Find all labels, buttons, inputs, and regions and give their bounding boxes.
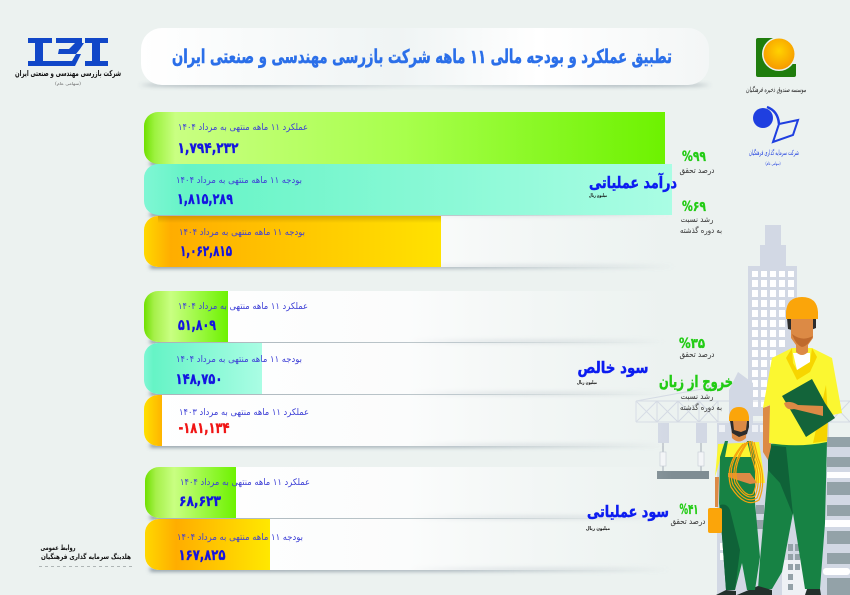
- bar: actual operating profit: [145, 467, 672, 518]
- bar: actual revenue: [144, 112, 665, 164]
- title banner: تطبیق عملکرد و بودجه مالی ۱۱ ماهه شرکت بازرسی مهندسی و صنعتی ایران: [172, 46, 672, 68]
- stats: net profit achievement and growth: [659, 336, 733, 412]
- bar: prior revenue: [144, 216, 672, 267]
- helmet: [729, 407, 749, 421]
- helmet: [786, 297, 818, 319]
- credit: public relations: روابط عمومی: [40, 544, 76, 552]
- stats: revenue achievement and growth: به دوره گذشته: [680, 225, 722, 235]
- building tower: [748, 225, 797, 416]
- bar: budget operating profit: [145, 519, 672, 570]
- bar: actual net profit: [144, 291, 672, 342]
- logo: teachers reserve fund: موسسه صندوق ذخیره فرهنگیان: [746, 85, 806, 94]
- bar: actual operating profit: عملکرد ۱۱ ماهه منتهی به مرداد ۱۴۰۴: [180, 478, 310, 488]
- heading: net profit: [577, 358, 648, 386]
- heading: operating profit: میلیون ریال: [586, 526, 610, 532]
- panel: operating profit: [145, 467, 706, 571]
- logo: teachers reserve fund: [746, 37, 806, 94]
- stats: revenue achievement and growth: [680, 149, 722, 235]
- bar: budget revenue: بودجه ۱۱ ماهه منتهی به مرداد ۱۴۰۴: [176, 176, 302, 186]
- bar: prior revenue: ۱,۰۶۲,۸۱۵: [180, 242, 232, 260]
- bar: budget operating profit: ۱۶۷,۸۲۵: [178, 546, 226, 564]
- bar: actual operating profit: ۶۸,۶۲۳: [179, 492, 221, 510]
- bar: budget operating profit: بودجه ۱۱ ماهه منتهی به مرداد ۱۴۰۴: [177, 533, 303, 543]
- title banner: [140, 28, 710, 87]
- bar: budget revenue: ۱,۸۱۵,۲۸۹: [177, 190, 233, 208]
- credit: public relations: [39, 544, 132, 566]
- stats: net profit achievement and growth: رشد نسبت: [680, 392, 714, 401]
- heading: operating profit: سود عملیاتی: [587, 502, 669, 521]
- logo: teachers investment company: (سهامی عام): [766, 161, 781, 167]
- illustration: large worker: [737, 297, 842, 595]
- stats: net profit achievement and growth: خروج از زیان: [659, 372, 733, 391]
- credit: public relations: هلدینگ سرمایه گذاری فرهنگیان: [41, 552, 131, 561]
- bar: budget revenue: [144, 164, 672, 215]
- stats: net profit achievement and growth: %۳۵: [679, 336, 705, 352]
- bar: actual revenue: ۱,۷۹۴,۲۳۲: [178, 139, 238, 157]
- bar: actual revenue: عملکرد ۱۱ ماهه منتهی به مرداد ۱۴۰۴: [178, 123, 308, 133]
- toolbox: [708, 508, 722, 533]
- logo: IEI company: (سهامی عام): [55, 81, 81, 86]
- panel: operating revenue: [144, 112, 722, 268]
- heading: operating revenue: درآمد عملیاتی: [589, 172, 677, 192]
- stats: operating profit achievement: [670, 502, 706, 526]
- logo: IEI company: شرکت بازرسی مهندسی و صنعتی ایران: [15, 69, 121, 78]
- stats: revenue achievement and growth: رشد نسبت: [680, 215, 714, 224]
- heading: net profit: سود خالص: [578, 358, 648, 377]
- stats: revenue achievement and growth: %۶۹: [682, 199, 706, 215]
- logo: teachers investment company: شرکت سرمایه گذاری فرهنگیان: [749, 148, 799, 157]
- bar: actual net profit: ۵۱,۸۰۹: [178, 316, 216, 334]
- illustration: small worker: [708, 407, 765, 595]
- bar: budget net profit: بودجه ۱۱ ماهه منتهی به مرداد ۱۴۰۴: [176, 355, 302, 365]
- bar: prior revenue: بودجه ۱۱ ماهه منتهی به مرداد ۱۴۰۴: [179, 228, 305, 238]
- stats: net profit achievement and growth: به دوره گذشته: [680, 402, 722, 412]
- heading: net profit: میلیون ریال: [577, 380, 597, 386]
- stats: revenue achievement and growth: درصد تحقق: [680, 166, 715, 175]
- stats: net profit achievement and growth: درصد تحقق: [680, 350, 715, 359]
- clipboard: [782, 379, 835, 437]
- rope coil: [729, 441, 763, 503]
- pants: [758, 441, 827, 589]
- bar: budget net profit: [144, 343, 672, 394]
- bar: actual net profit: عملکرد ۱۱ ماهه منتهی به مرداد ۱۴۰۴: [178, 302, 308, 312]
- lower building with stripes: [717, 372, 850, 595]
- stats: revenue achievement and growth: %۹۹: [682, 149, 706, 165]
- stats: operating profit achievement: %۴۱: [680, 502, 698, 518]
- bar: prior net profit: عملکرد ۱۱ ماهه منتهی به مرداد ۱۴۰۳: [179, 408, 309, 418]
- logo: teachers investment company: [749, 107, 799, 167]
- heading: operating revenue: میلیون ریال: [589, 193, 607, 199]
- stats: operating profit achievement: درصد تحقق: [670, 517, 706, 526]
- heading: operating profit: [586, 502, 669, 532]
- crane truss and hoist: [636, 380, 850, 479]
- heading: operating revenue: [589, 172, 677, 199]
- bar: prior net profit: [144, 395, 672, 446]
- logo: IEI company: [15, 38, 121, 86]
- bar: budget net profit: ۱۴۸,۷۵۰: [176, 370, 222, 388]
- panel: net profit: [144, 291, 733, 447]
- bar: prior net profit: -۱۸۱,۱۳۴: [178, 419, 230, 437]
